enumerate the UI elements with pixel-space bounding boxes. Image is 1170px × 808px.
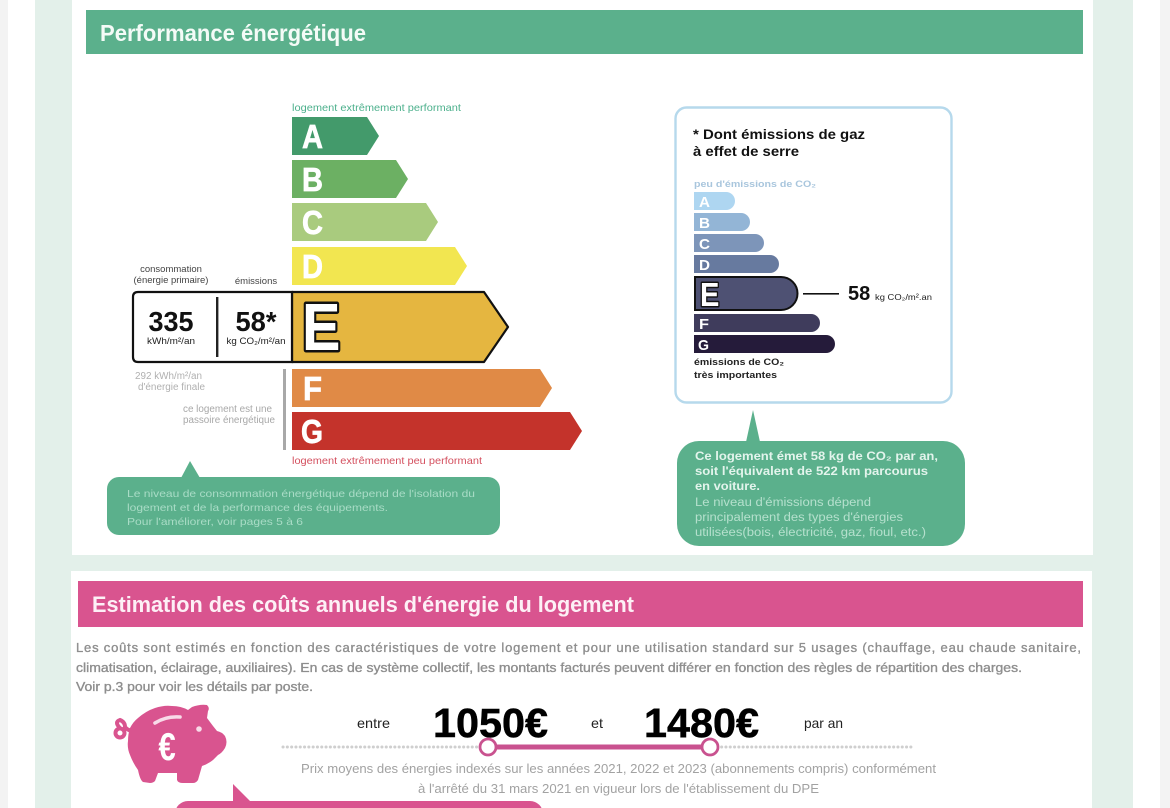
final energy note: 292 kWh/m²/an xyxy=(135,371,202,382)
passoire note: ce logement est une xyxy=(183,404,272,415)
value: 58 kg CO2: 58 xyxy=(848,283,870,305)
cost range: entre xyxy=(357,715,390,731)
panel: estimation des coûts xyxy=(71,571,1092,808)
class F arrow: F xyxy=(303,370,322,407)
column labels: (énergie primaire) xyxy=(134,275,208,286)
description text: Les coûts sont estimés en fonction des caractéristiques de votre logement et pour une utilisation standard sur 5 usages (chauffage, eau chaude sanitaire, xyxy=(76,640,1081,655)
CO2 class E bar: E xyxy=(700,276,719,313)
class C arrow: C xyxy=(302,204,323,241)
class G arrow xyxy=(292,412,582,450)
heading: greenhouse gas: à effet de serre xyxy=(693,144,800,159)
CO2 class F bar xyxy=(694,314,820,333)
column labels: consommation xyxy=(140,264,202,275)
energy scale chart xyxy=(133,102,582,467)
passoire note: passoire énergétique xyxy=(183,415,275,426)
heading: performance énergétique xyxy=(86,10,1083,54)
cost range: 1480€ xyxy=(644,700,759,746)
label: high emissions: émissions de CO₂ xyxy=(694,357,784,367)
class A arrow: A xyxy=(302,118,323,155)
callout: consumption xyxy=(107,461,500,535)
value: emissions: 58* xyxy=(236,306,277,337)
heading: estimation des coûts xyxy=(78,581,1083,627)
class B arrow: B xyxy=(302,161,323,198)
panel: performance énergétique xyxy=(72,0,1093,555)
column labels xyxy=(134,264,277,287)
callout: emissions: soit l'équivalent de 522 km parcourus xyxy=(695,466,928,478)
CO2 class C bar: C xyxy=(699,236,710,253)
value: emissions: kg CO₂/m²/an xyxy=(226,336,286,347)
value: emissions xyxy=(226,306,286,347)
class B arrow xyxy=(292,160,408,198)
CO2 class E bar xyxy=(695,276,798,313)
cost range: et xyxy=(591,715,603,731)
class A arrow xyxy=(292,117,379,155)
heading: performance énergétique: Performance énergétique xyxy=(100,20,366,46)
class D arrow xyxy=(292,247,467,285)
CO2 class C bar xyxy=(694,234,764,253)
class G arrow: G xyxy=(301,413,323,450)
final energy note: d'énergie finale xyxy=(138,382,205,393)
heading: greenhouse gas: * Dont émissions de gaz xyxy=(693,127,865,142)
description text: Voir p.3 pour voir les détails par poste. xyxy=(76,679,313,694)
label: high emissions xyxy=(694,357,784,380)
price note: à l'arrêté du 31 mars 2021 en vigueur lors de l'établissement du DPE xyxy=(418,781,819,796)
callout: pink bubble xyxy=(175,784,543,808)
CO2 class B bar: B xyxy=(699,215,710,232)
cost range slider xyxy=(283,739,912,755)
icon: piggy bank xyxy=(116,705,226,783)
price note: Prix moyens des énergies indexés sur les années 2021, 2022 et 2023 (abonnements compris) conformément xyxy=(301,761,936,776)
label: low emissions: peu d'émissions de CO₂ xyxy=(694,179,816,189)
CO2 class G bar: G xyxy=(698,337,709,354)
class C arrow xyxy=(292,203,438,241)
callout: emissions xyxy=(677,410,965,546)
class D arrow: D xyxy=(302,248,323,285)
CO2 class D bar xyxy=(694,255,779,274)
heading: estimation des coûts: Estimation des coûts annuels d'énergie du logement xyxy=(92,592,635,617)
class E letter: E xyxy=(302,290,340,365)
label: high emissions: très importantes xyxy=(694,370,777,380)
description text xyxy=(76,640,1081,694)
callout: emissions: utilisées(bois, électricité, gaz, fioul, etc.) xyxy=(695,527,926,539)
CO2 class B bar xyxy=(694,213,750,232)
CO2 class F bar: F xyxy=(699,316,709,333)
callout: consumption: Le niveau de consommation énergétique dépend de l'isolation du xyxy=(127,488,475,500)
callout: consumption: logement et de la performance des équipements. xyxy=(127,502,388,514)
heading: greenhouse gas xyxy=(693,127,865,159)
class F arrow xyxy=(292,369,552,407)
column labels: émissions xyxy=(235,276,277,287)
value: energy consumption: 335 xyxy=(148,306,194,337)
value: energy consumption: kWh/m²/an xyxy=(147,336,195,347)
cost range: 1050€ xyxy=(433,700,548,746)
callout: emissions: principalement des types d'énergies xyxy=(695,512,903,524)
CO2 class A bar: A xyxy=(699,194,710,211)
CO2 class A bar xyxy=(694,192,735,211)
CO2 class D bar: D xyxy=(699,257,710,274)
class E highlighted arrow with values xyxy=(133,290,508,365)
callout: emissions: Le niveau d'émissions dépend xyxy=(695,497,871,509)
label: bottom of scale: logement extrêmement peu performant xyxy=(292,455,482,467)
cost range xyxy=(357,700,843,746)
value: 58 kg CO2 xyxy=(803,283,932,305)
price note xyxy=(301,761,936,796)
passoire note xyxy=(183,404,275,426)
callout: consumption: Pour l'améliorer, voir pages 5 à 6 xyxy=(127,516,303,528)
final energy note xyxy=(135,371,205,393)
description text: climatisation, éclairage, auxiliaires). En cas de système collectif, les montants facturés peuvent différer en fonction des règles de répartition des charges. xyxy=(76,660,1022,675)
CO2 class G bar xyxy=(694,335,835,354)
icon: piggy bank: € xyxy=(158,726,176,769)
value: 58 kg CO2: kg CO₂/m².an xyxy=(875,292,932,302)
callout: emissions: en voiture. xyxy=(695,481,760,493)
callout: emissions: Ce logement émet 58 kg de CO₂ par an, xyxy=(695,451,938,463)
cost range: par an xyxy=(804,715,843,731)
label: top of scale: logement extrêmement performant xyxy=(292,102,461,114)
panel: greenhouse gas emissions xyxy=(676,108,952,402)
